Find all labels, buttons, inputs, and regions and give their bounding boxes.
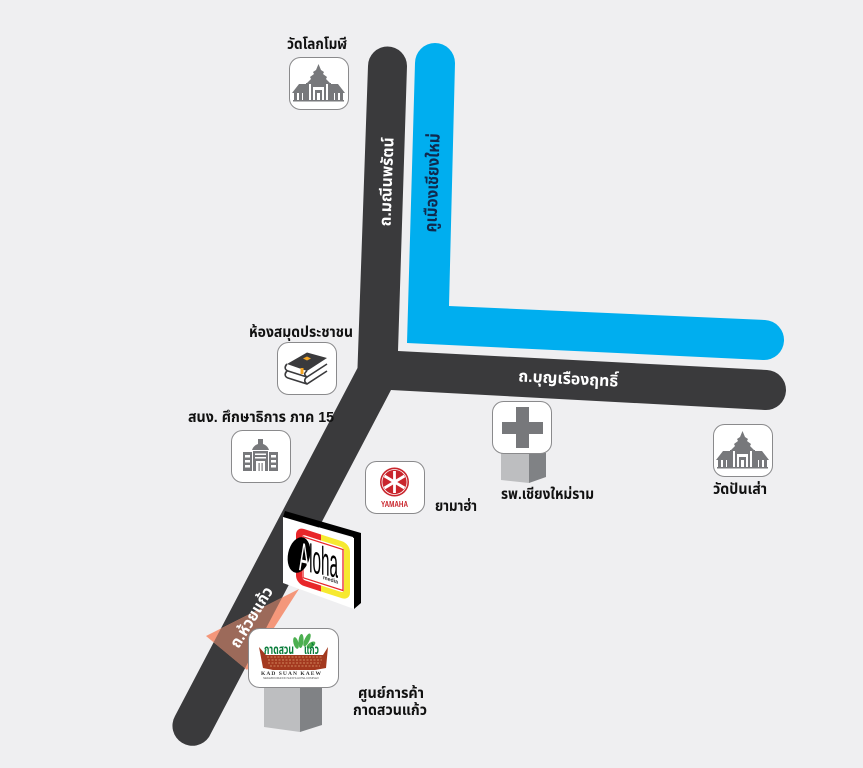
kad suan kaew: pedestal and logo card: แก้ว xyxy=(304,642,319,657)
label: kad suan kaew xyxy=(353,684,427,719)
label: yamaha: ยามาฮ่า xyxy=(435,497,477,515)
road label: north: ถ.มณีนพรัตน์ xyxy=(377,137,398,227)
view cone: salmon arrow from sign xyxy=(206,589,299,670)
label: temple east: วัดปันเส่า xyxy=(713,480,767,498)
kad suan kaew: pedestal and logo card: KAD SUAN KAEW xyxy=(261,671,322,677)
icon: temple north xyxy=(290,58,348,110)
hospital: pedestal and cross card xyxy=(492,402,552,483)
label: library: ห้องสมุดประชาชน xyxy=(249,323,353,341)
label: hospital: รพ.เชียงใหม่ราม xyxy=(501,485,594,503)
kad suan kaew: pedestal and logo card: NEIGHBOURHOOD SHOP & HOTEL COMPLEX xyxy=(263,676,319,680)
kad suan kaew: pedestal and logo card xyxy=(248,628,338,732)
canal label: คูเมืองเชียงใหม่ xyxy=(420,133,445,233)
aloha media sign: media xyxy=(323,575,339,586)
label: temple north: วัดโลกโมฬี xyxy=(287,36,347,53)
aloha media sign xyxy=(283,511,361,609)
icon: government building xyxy=(232,430,290,482)
icon: yamaha xyxy=(366,462,424,514)
canal: blue moat road xyxy=(407,43,784,360)
icon: yamaha: YAMAHA xyxy=(381,499,408,509)
icon: books xyxy=(278,342,336,394)
road label: southwest: ถ.ห้วยแก้ว xyxy=(226,584,277,651)
icon: temple east xyxy=(714,424,772,476)
label: education office: สนง. ศึกษาธิการ ภาค 15 xyxy=(188,409,334,426)
road label: east: ถ.บุญเรืองฤทธิ์ xyxy=(518,365,620,391)
label: kad suan kaew: ศูนย์การค้า xyxy=(358,684,424,703)
aloha media sign: Aloha xyxy=(299,533,338,587)
label: kad suan kaew: กาดสวนแก้ว xyxy=(353,701,427,719)
kad suan kaew: pedestal and logo card: กาดสวน xyxy=(264,642,294,657)
